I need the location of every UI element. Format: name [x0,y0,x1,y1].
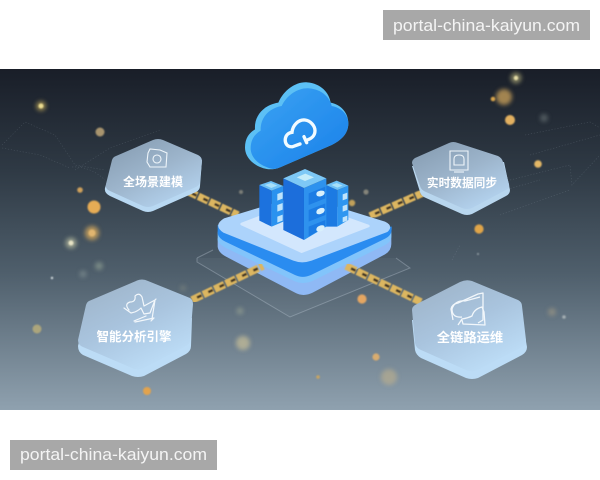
cloud icon [245,82,348,169]
glass base plate outline [197,250,410,317]
server: right tower [326,181,348,227]
cloud glyph [285,120,315,147]
hexagon rim [412,162,510,215]
watermark: top right [383,10,590,40]
platform blue band [218,225,392,277]
chain: bottom right [346,266,421,302]
platform bottom slab [218,233,391,295]
icon: monitor [450,151,468,172]
icon: analytics wave [124,294,156,322]
icon: scene frame [147,149,167,167]
hexagon rim [78,318,192,377]
label: 实时数据同步 [427,176,497,190]
hexagon face [412,142,509,209]
icon: loop panels [451,293,485,325]
circuit lines: left [2,122,160,180]
watermark: top right: portal-china-kaiyun.com [393,16,580,35]
chain: bottom left [192,266,263,300]
label: 全场景建模 [123,174,183,189]
glowing particles [32,72,566,395]
server: left tower [259,181,283,227]
hexagon rim [105,160,202,212]
label: 智能分析引擎 [96,329,172,344]
hexagon: 智能分析引擎 [78,280,193,377]
watermark: bottom left [10,440,217,470]
hexagon: 全链路运维 [412,280,527,379]
hexagon face [78,280,193,370]
platform light stripe [218,228,391,283]
platform top face [218,197,390,262]
central platform and servers [218,169,392,295]
server: centre tower [283,169,326,240]
platform inner panel [242,202,368,252]
hexagon face [412,280,526,372]
background panel [0,69,600,410]
cloud front face [251,88,348,169]
chain: top right [370,192,425,216]
hexagon rim [412,318,527,379]
chain: top left [187,191,238,215]
hexagon: 实时数据同步 [412,142,510,215]
circuit lines: right [452,122,600,260]
cloud side face [245,82,348,169]
label: 全链路运维 [437,329,503,345]
watermark: bottom left: portal-china-kaiyun.com [20,445,207,464]
hexagon face [106,139,202,207]
hexagon: 全场景建模 [105,139,202,212]
